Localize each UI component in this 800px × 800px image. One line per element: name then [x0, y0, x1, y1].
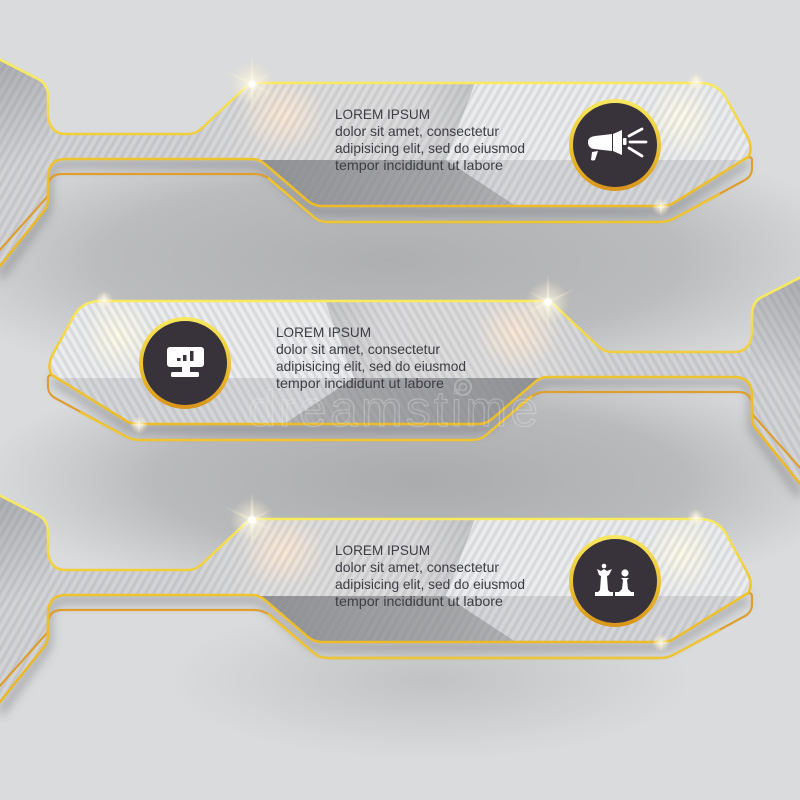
panel 2 glass body and gold outlines [35, 268, 800, 495]
icon badge: megaphone [571, 101, 659, 189]
panel 1: megaphone banner [0, 50, 765, 277]
panel 2: monitor banner [35, 268, 800, 495]
panel 2 text block [276, 324, 466, 391]
panel 3 text block: tempor incididunt ut labore [335, 593, 503, 609]
panel 1 glass body and gold outlines [0, 50, 765, 277]
panel 3 text block: adipisicing elit, sed do eiusmod [335, 576, 525, 592]
panel 1 text block: tempor incididunt ut labore [335, 157, 503, 173]
panel 3 text block [335, 542, 525, 609]
panel 1 text block: LOREM IPSUM [335, 106, 430, 122]
panel 2 text block: tempor incididunt ut labore [276, 375, 444, 391]
panel 3 text block: LOREM IPSUM [335, 542, 430, 558]
panel 2 text block: dolor sit amet, consectetur [276, 341, 440, 357]
panel 3: chess banner [0, 486, 765, 713]
panel 1 text block: adipisicing elit, sed do eiusmod [335, 140, 525, 156]
icon badge: monitor with bar chart [141, 319, 229, 407]
panel 3 glass body and gold outlines [0, 486, 765, 713]
icon badge: chess pieces [571, 537, 659, 625]
panel 1 text block: dolor sit amet, consectetur [335, 123, 499, 139]
panel 1 text block [335, 106, 525, 173]
watermark: dreamstime [248, 381, 538, 437]
panel 2 text block: LOREM IPSUM [276, 324, 371, 340]
panel 2 text block: adipisicing elit, sed do eiusmod [276, 358, 466, 374]
panel 3 text block: dolor sit amet, consectetur [335, 559, 499, 575]
